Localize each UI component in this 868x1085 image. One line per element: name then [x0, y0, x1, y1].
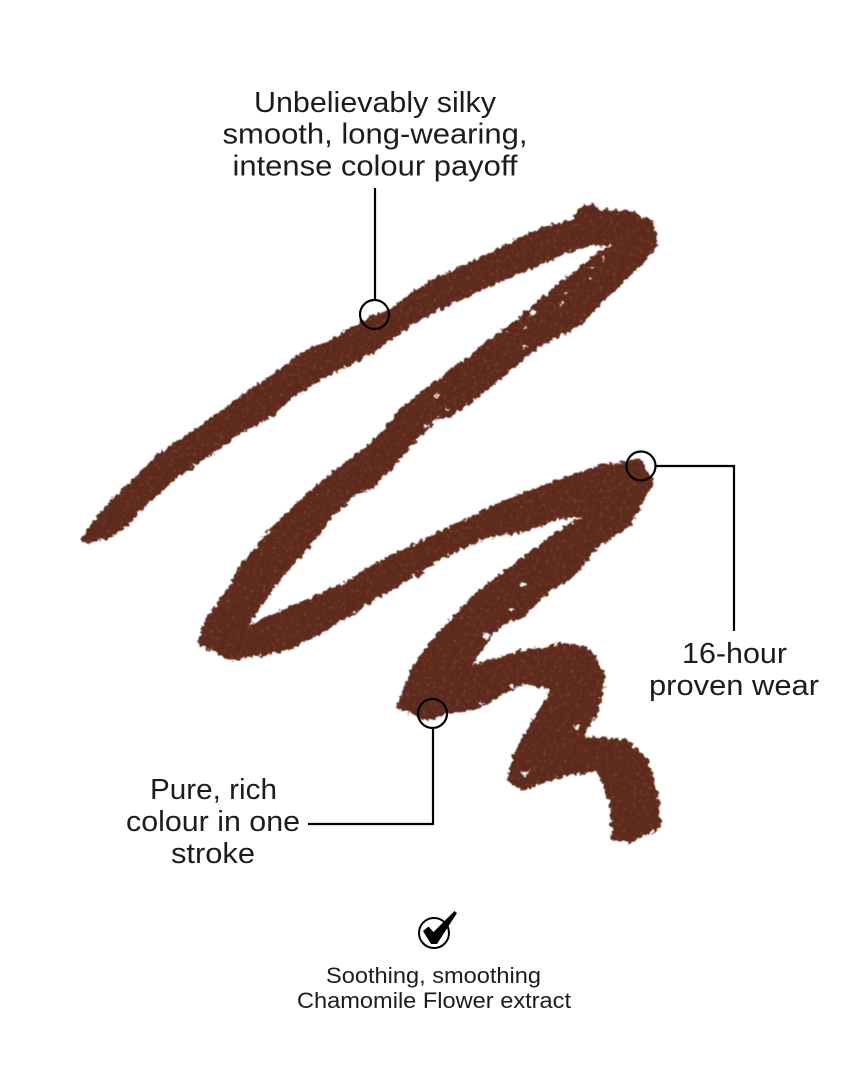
callout: pure rich colour: stroke [171, 838, 255, 870]
callout text: pure rich colour: Pure, rich [150, 774, 277, 806]
callout: 16-hour wear [626, 452, 819, 702]
benefit text: Soothing, smoothing [326, 963, 541, 988]
benefit text [297, 963, 571, 1013]
callout text: 16-hour wear: 16-hour [682, 638, 787, 670]
callout text: silky smooth: Unbelievably silky [254, 87, 497, 119]
callout: 16-hour wear: proven wear [649, 670, 819, 702]
callout: pure rich colour: colour in one [126, 806, 300, 838]
icon: check mark in circle [419, 911, 457, 948]
benefit text: Chamomile Flower extract [297, 988, 571, 1013]
callout: silky smooth [222, 87, 528, 329]
callout: pure rich colour [126, 699, 447, 870]
callout: silky smooth: smooth, long-wearing, [222, 118, 528, 150]
pencil swatch stroke [82, 205, 660, 842]
callout: silky smooth: intense colour payoff [232, 150, 519, 182]
